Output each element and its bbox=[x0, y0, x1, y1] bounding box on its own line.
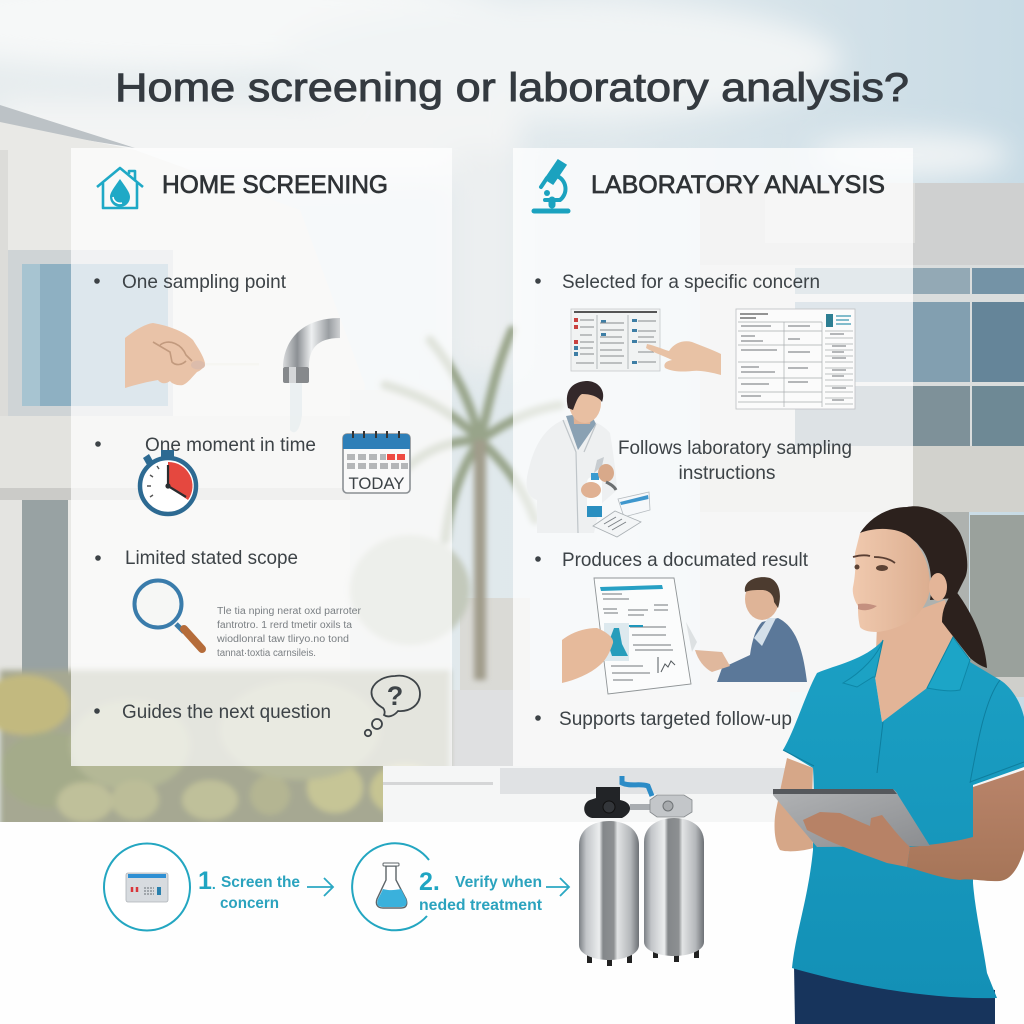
tablet bbox=[773, 789, 930, 847]
step 2 text: neded treatment bbox=[419, 897, 543, 914]
icon: house with water drop bbox=[97, 168, 143, 208]
document: test form bbox=[736, 309, 855, 409]
right house bbox=[700, 183, 1024, 265]
bullet: limited stated scope: Limited stated scope bbox=[125, 547, 298, 569]
left arm bbox=[775, 758, 813, 851]
ear bbox=[929, 573, 947, 601]
small scope text: wiodlonral taw tliryo.no tond bbox=[216, 634, 349, 645]
document: comparison chart bbox=[571, 309, 660, 371]
step 1: screen the concern bbox=[104, 844, 333, 930]
icon: hand holding test strip bbox=[125, 323, 259, 388]
right arm bbox=[907, 770, 1024, 881]
panel: laboratory analysis bbox=[513, 148, 913, 766]
right collar bbox=[927, 637, 970, 691]
left collar bbox=[843, 640, 883, 687]
illustration: hand holding lab report bbox=[562, 578, 691, 694]
neck bbox=[875, 600, 953, 722]
text: follows laboratory sampling instructions: instructions bbox=[678, 462, 776, 484]
hair top bbox=[860, 506, 967, 600]
icon: stopwatch bbox=[140, 450, 196, 514]
step 2 text: Verify when bbox=[455, 874, 542, 891]
water treatment tanks bbox=[579, 776, 704, 966]
small scope text: fantrotro. 1 rerd tmetir oxils ta bbox=[217, 620, 352, 631]
illustration: scientist in lab coat bbox=[527, 381, 650, 537]
icon: magnifying glass bbox=[134, 580, 202, 649]
step number 1: 1. bbox=[198, 867, 216, 895]
icon: thought bubble with question mark: ? bbox=[387, 681, 403, 711]
bullet: selected for a specific concern: Selected for a specific concern bbox=[562, 271, 820, 293]
icon: thought bubble with question mark bbox=[365, 676, 420, 736]
woman with tablet bbox=[773, 506, 1024, 1024]
pants bbox=[794, 965, 995, 1024]
panel: home screening bbox=[71, 148, 452, 766]
small scope text: Tle tia nping nerat oxd parroter bbox=[217, 606, 362, 617]
hand on tablet bbox=[803, 812, 910, 867]
icon: flask in open circle bbox=[352, 843, 429, 930]
ponytail and hair back bbox=[942, 590, 987, 668]
facial features bbox=[853, 555, 895, 610]
heading: laboratory analysis: LABORATORY ANALYSIS bbox=[591, 171, 885, 199]
step 2 text bbox=[419, 874, 543, 914]
step 1 text bbox=[220, 874, 300, 912]
title: Home screening or laboratory analysis? bbox=[115, 66, 909, 110]
icon: calendar today: TODAY bbox=[348, 474, 404, 493]
step number 2: 2. bbox=[419, 868, 440, 896]
arrow to treatment bbox=[546, 878, 569, 896]
illustration: man receiving report bbox=[686, 577, 807, 682]
icon: test kit in circle bbox=[104, 844, 190, 930]
bullet: supports targeted follow-up: Supports targeted follow-up bbox=[559, 708, 792, 730]
bullet: produces a documated result: Produces a documated result bbox=[562, 549, 809, 571]
palm bbox=[350, 330, 560, 680]
small scope text: tannat·toxtia carnsileis. bbox=[217, 648, 316, 659]
step 2: verify when needed bbox=[352, 843, 569, 930]
bullet: one moment in time: One moment in time bbox=[145, 434, 316, 456]
left house bbox=[0, 105, 135, 148]
icon: calendar today bbox=[343, 431, 410, 493]
icon: pointing hand bbox=[646, 341, 721, 375]
shirt bbox=[783, 637, 1024, 998]
bullet: guides the next question: Guides the next question bbox=[122, 701, 331, 723]
arrow to step 2 bbox=[307, 878, 333, 896]
icon: chrome faucet with water bbox=[283, 318, 340, 432]
icon: microscope bbox=[534, 160, 568, 211]
text: follows laboratory sampling instructions bbox=[618, 437, 852, 484]
heading: home screening: HOME SCREENING bbox=[162, 171, 388, 199]
bullet: one sampling point: One sampling point bbox=[122, 271, 287, 293]
small scope text bbox=[216, 606, 362, 659]
step 1 text: Screen the bbox=[221, 874, 300, 891]
step 1 text: concern bbox=[220, 895, 279, 912]
text: follows laboratory sampling instructions: Follows laboratory sampling bbox=[618, 437, 852, 459]
shrubs bbox=[0, 670, 450, 830]
face bbox=[853, 529, 930, 632]
